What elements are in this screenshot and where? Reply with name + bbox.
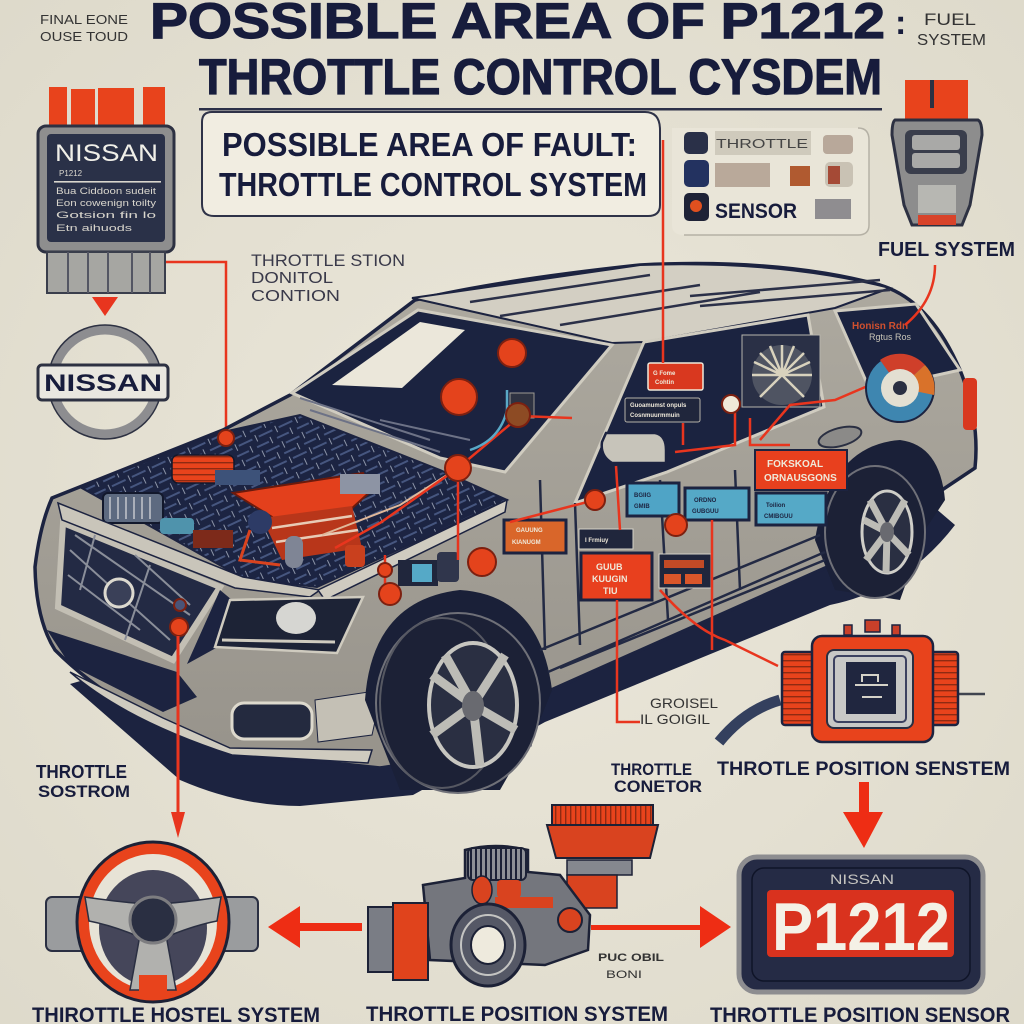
door lines and sill [540,470,825,672]
Nissan logo: NISSAN [44,370,162,397]
door handle [816,423,864,451]
label boxes on car: ORDNO [694,498,717,504]
red leader lines on car [335,140,935,722]
left connector module: NISSAN [55,140,158,167]
callout: possible area of fault [202,112,660,216]
legend panel: SENSOR [715,200,797,223]
label boxes on car: KUUGIN [592,574,628,584]
rear window [835,304,960,390]
title: : [895,4,906,42]
taillight [963,378,977,430]
side mirror [602,433,666,463]
rear window label: Rgtus Ros [869,332,912,342]
top left caption: OUSE TOUD [40,29,128,44]
P1212 code panel: NISSAN [830,871,894,887]
left connector module: Eon cowenign toilty [56,198,157,208]
callout: possible area of fault: THROTTLE CONTROL SYSTEM [219,166,647,203]
fog light [232,703,312,739]
top right caption [917,10,986,49]
rear wheel [815,440,945,600]
engine parts [103,455,458,568]
throttle control condition label: DONITOL [251,270,333,287]
arrow down [843,782,883,848]
car body [35,264,976,768]
left connector module: P1212 [59,169,83,178]
throttle position sensor component [719,620,985,742]
Nissan logo [38,325,168,439]
grille emblem [105,579,133,607]
steering wheel icon [46,842,258,1002]
throttle control condition label: THROTTLE STION [251,251,405,270]
engine bay [80,415,507,587]
throttle connector label [611,760,702,796]
label boxes on car: Toilion [766,503,786,509]
arrow right [591,906,731,948]
left connector module: Bua Ciddoon sudeit [56,186,157,196]
throttle system label [36,762,130,801]
front wheel [365,590,552,793]
throttle control condition label: CONTION [251,288,340,305]
fender highlight [318,500,507,600]
front fascia and grille [58,523,220,660]
lower dark intake [47,630,197,712]
label boxes on car: KIANUGM [512,540,541,546]
front side window [575,315,824,503]
throttle control condition label [251,251,405,305]
ground shadow [70,495,955,806]
label boxes on car: Cosnmuurmmuin [630,413,680,419]
label boxes on car: G Fome [653,371,676,377]
hood lip highlight [58,503,320,597]
label boxes on car: CMIBGUU [764,514,793,520]
left connector module: Etn aihuods [56,223,133,233]
long leader arrow to steering wheel [171,636,185,838]
label boxes on car: GUUB [596,562,623,572]
title: THROTTLE CONTROL CYSDEM [199,49,882,105]
callout: possible area of fault: POSSIBLE AREA OF FAULT: [222,126,637,163]
throttle connector label: CONETOR [614,777,702,796]
lower bumper strip [70,672,372,763]
top right caption: FUEL [924,10,976,29]
label boxes on car: GMIB [634,504,650,510]
label boxes on car: FOKSKOAL [767,459,823,470]
fuel system label: FUEL SYSTEM [878,239,1015,261]
grotsel label: IL GOIGIL [640,711,710,727]
label boxes on car: TIU [603,586,618,596]
headlight [215,597,363,653]
label boxes on car: I Frmiuy [585,538,609,544]
legend panel: THROTTLE [716,136,808,151]
right connector module [892,80,982,225]
title [150,0,906,110]
grotsel label: GROISEL [650,695,718,711]
label boxes on car: BGIIG [634,493,651,499]
left connector module: Gotsion fin lo [56,210,156,220]
rear window label [852,321,912,342]
grotsel label [640,695,718,727]
windshield [292,310,612,472]
throttle system label: SOSTROM [38,782,130,801]
red heart marker [92,297,118,316]
status circles [170,339,740,636]
left connector module [38,87,174,293]
color wheel gauge [866,354,935,422]
P1212 code panel [739,857,983,992]
dark wedge beside grille [187,590,232,664]
fan display in window [742,335,820,407]
bumper light panel [315,690,382,742]
label boxes on car: GUBGUU [692,509,719,515]
label boxes on car: Cohtin [655,380,674,386]
P1212 code panel: P1212 [772,889,950,965]
arrow left [268,906,362,948]
small caption under engine: BONI [606,969,642,981]
label boxes on car: ORNAUSGONS [764,473,837,484]
throttle connector label: THROTTLE [611,760,692,779]
label boxes on car: GAUUNG [516,528,543,534]
label boxes on car: Guoamumst onpuls [630,403,687,409]
roof [412,264,890,343]
label boxes on car [398,363,847,600]
throttle position sensor label: THROTLE POSITION SENSTEM [717,759,1010,780]
top right caption: SYSTEM [917,32,986,49]
small caption under engine: PUC OBIL [598,952,664,964]
throttle system label: THROTTLE [36,762,127,782]
top left caption [40,12,128,44]
throttle body component [368,805,658,986]
legend panel [672,128,869,235]
small caption under engine [598,952,664,981]
rear window label: Honisn Rdn [852,321,908,332]
car [35,140,977,806]
left connector leader [166,262,226,430]
top left caption: FINAL EONE [40,12,128,27]
